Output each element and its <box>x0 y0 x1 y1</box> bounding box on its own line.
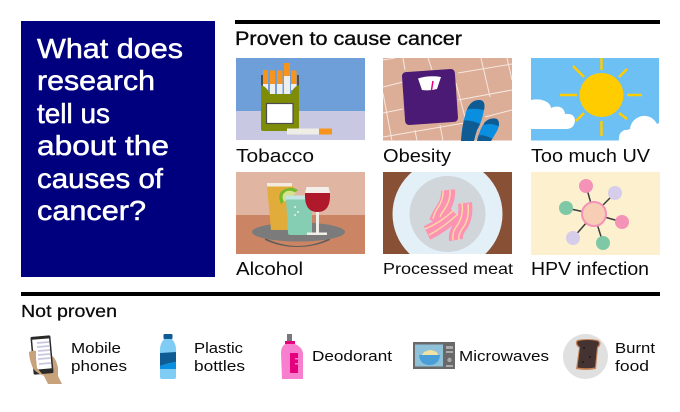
label: mobile phones: Mobile <box>71 340 121 357</box>
label: burnt food <box>615 340 656 375</box>
icon: plastic bottle <box>160 334 176 379</box>
label: microwaves: Microwaves <box>459 348 549 365</box>
icon: mobile phone <box>29 335 62 384</box>
label: plastic bottles: Plastic <box>194 340 244 357</box>
label: burnt food: Burnt <box>615 340 656 357</box>
label: mobile phones <box>71 340 127 375</box>
icon: deodorant <box>281 334 303 379</box>
heading: proven to cause cancer: Proven to cause cancer <box>235 28 463 50</box>
panel: processed meat <box>383 172 512 254</box>
panel: HPV infection <box>531 172 660 255</box>
title: research <box>37 65 155 96</box>
heading: not proven: Not proven <box>21 301 117 321</box>
panel: too much UV <box>531 58 659 141</box>
label: deodorant: Deodorant <box>312 348 393 365</box>
icon: bacon <box>425 190 468 240</box>
panel: title <box>21 21 215 277</box>
panel: obesity <box>383 58 512 142</box>
label: alcohol: Alcohol <box>236 259 303 279</box>
label: tobacco: Tobacco <box>236 146 314 166</box>
title: tell us <box>37 98 110 129</box>
label: burnt food: food <box>615 358 649 375</box>
label: processed meat: Processed meat <box>383 261 514 278</box>
title <box>37 33 183 226</box>
label: plastic bottles <box>194 340 245 375</box>
label: plastic bottles: bottles <box>194 358 245 375</box>
icon: slippers <box>461 100 499 141</box>
title: about the <box>37 130 169 161</box>
label: obesity: Obesity <box>383 146 451 166</box>
title: cancer? <box>37 195 146 226</box>
label: mobile phones: phones <box>71 358 127 375</box>
title: What does <box>37 33 183 64</box>
title: causes of <box>37 163 163 194</box>
panel: tobacco <box>236 58 365 140</box>
icon: microwave <box>413 342 455 369</box>
icon: burnt toast <box>563 334 608 379</box>
label: too much UV: Too much UV <box>531 146 650 166</box>
label: HPV infection: HPV infection <box>531 259 649 279</box>
panel: alcohol <box>236 172 365 254</box>
